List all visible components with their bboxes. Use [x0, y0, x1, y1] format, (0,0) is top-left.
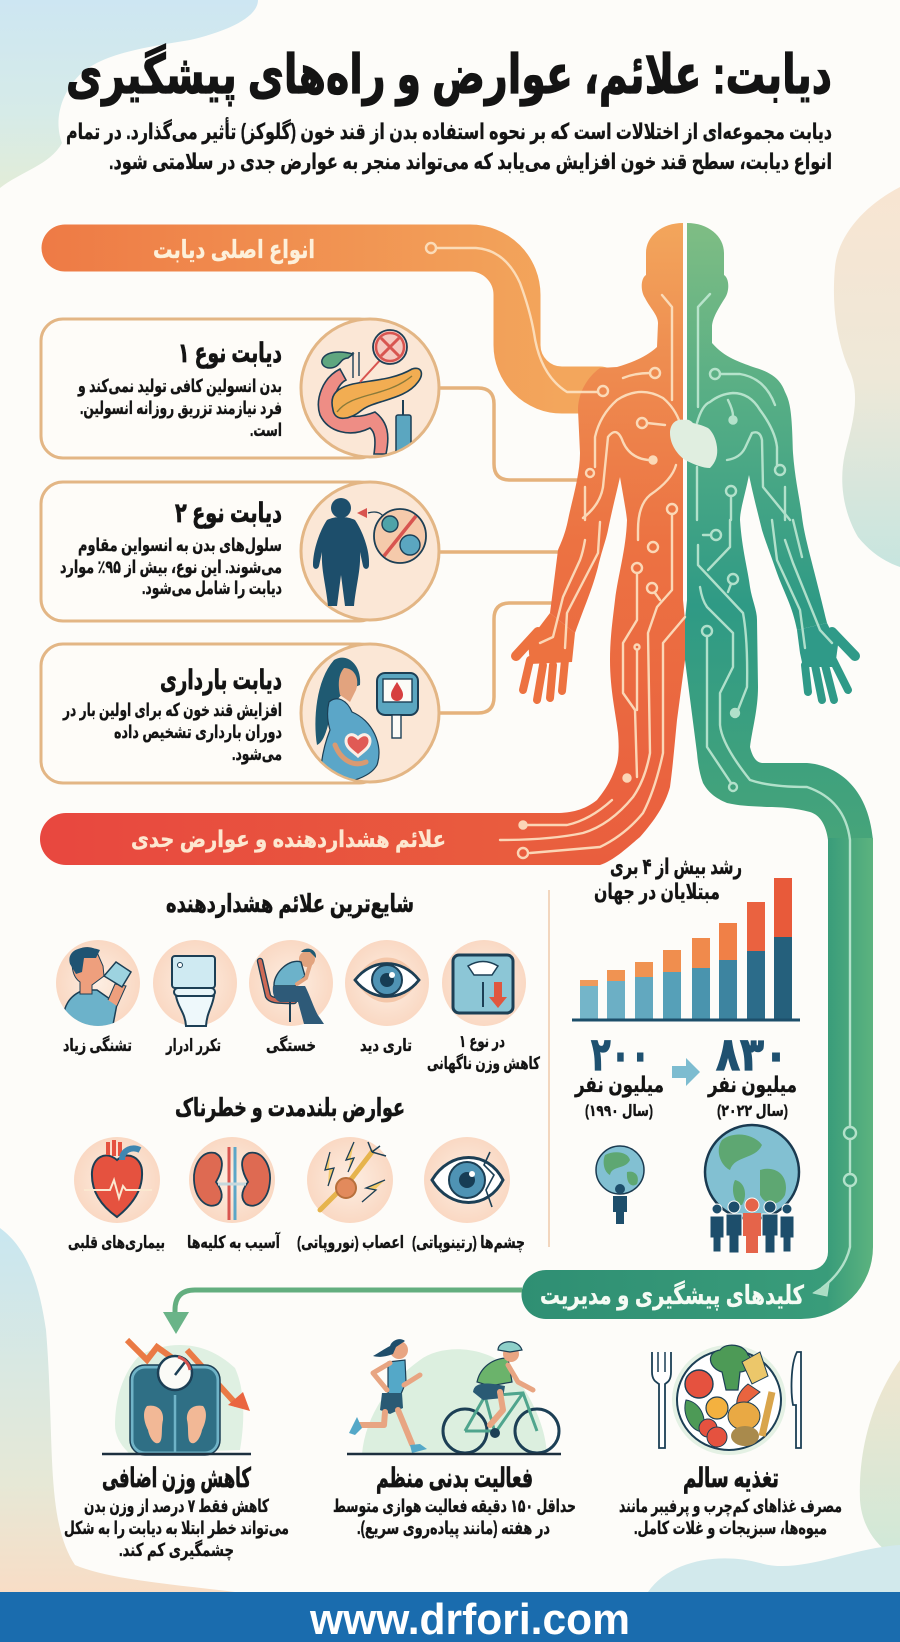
complication: kidney damage: [187, 1137, 281, 1252]
card text: بدن انسولین کافی تولید نمی‌کند و: [77, 376, 282, 397]
ground line: [347, 1453, 561, 1455]
symptom: blurred vision: تاری دید: [360, 1036, 412, 1055]
complication: retinopathy: [412, 1137, 525, 1253]
icon: healthy plate: [652, 1345, 801, 1455]
symptom: frequent urination: [153, 940, 237, 1056]
body silhouette: [426, 223, 873, 1319]
prevention: weight loss text: کاهش وزن اضافی: [102, 1463, 251, 1494]
arrow: [672, 1058, 700, 1086]
bar chart: [572, 878, 800, 1020]
background blob: bottom left: [0, 1228, 235, 1592]
background blob: top left: [0, 0, 258, 188]
complication: retinopathy: چشم‌ها (رتینوپاتی): [412, 1233, 525, 1253]
banner label: علائم هشداردهنده و عوارض جدی: [131, 826, 446, 853]
prevention: healthy eating text: میوه‌ها، سبزیجات و غلات کامل.: [634, 1518, 827, 1539]
card text: دیابت نوع ۱: [178, 338, 282, 369]
icon: pancreas: [301, 319, 439, 460]
icon: runner and cyclist: [347, 1339, 561, 1454]
footer: [0, 1592, 900, 1642]
banner: main types: [65, 236, 600, 390]
body: left orange half: [516, 223, 685, 865]
stat: 200 million: [574, 1028, 664, 1120]
symptom: sudden weight loss: کاهش وزن ناگهانی: [427, 1053, 540, 1074]
prevention: weight loss text: می‌تواند خطر ابتلا به دیابت را به شکل: [64, 1518, 289, 1539]
heart shape: [670, 420, 717, 468]
prevention: physical activity text: حداقل ۱۵۰ دقیقه فعالیت هوازی متوسط: [333, 1496, 576, 1517]
card text: دیابت نوع ۲: [175, 498, 282, 529]
banner label: انواع اصلی دیابت: [153, 236, 315, 265]
banner: warning symptoms: [40, 813, 580, 865]
stat: 200 million: میلیون نفر: [574, 1072, 664, 1098]
stat: 830 million: میلیون نفر: [707, 1072, 797, 1098]
circuit lines: green: [697, 294, 856, 1296]
heading: common symptoms: شایع‌ترین علائم هشداردهنده: [166, 890, 414, 919]
icon: large globe with people: [705, 1125, 799, 1253]
connectors from cards to body: [436, 388, 580, 713]
arrow head: [163, 1312, 189, 1334]
symptom: sudden weight loss: در نوع ۱: [459, 1032, 505, 1052]
complication: neuropathy: [297, 1137, 404, 1253]
card text: دیابت بارداری: [160, 665, 282, 696]
card text: [60, 498, 282, 599]
background blob: bottom right blue: [648, 1545, 900, 1592]
intro text: [66, 116, 832, 175]
prevention: physical activity text: فعالیت بدنی منظم: [376, 1463, 533, 1493]
card text: سلول‌های بدن به انسواین مقاوم: [78, 535, 282, 556]
symptom: sudden weight loss: [427, 940, 540, 1074]
card text: دیابت را شامل می‌شود.: [142, 578, 282, 599]
stat: 200 million: (سال ۱۹۹۰): [585, 1103, 653, 1120]
chart title: مبتلایان در جهان: [594, 879, 720, 905]
stat: 830 million: (سال ۲۰۲۲): [717, 1103, 788, 1120]
symptom: increased thirst: [56, 940, 140, 1055]
card text: است.: [250, 420, 282, 440]
prevention: healthy eating text: تغذیه سالم: [683, 1463, 779, 1493]
card text: افزایش قند خون که برای اولین بار در: [62, 700, 282, 721]
icon: pregnant woman and glucose meter: [301, 644, 439, 785]
stat: 830 million: [707, 1028, 797, 1120]
circuit lines: orange: [426, 243, 685, 858]
prevention: physical activity text: در هفته (مانند پیاده‌روی سریع).: [357, 1518, 550, 1539]
card: type 1 diabetes: [41, 319, 439, 460]
card: gestational diabetes: [41, 644, 439, 785]
icon: overweight person and cell: [301, 482, 439, 620]
symptom: frequent urination: تکرر ادرار: [165, 1036, 221, 1056]
icon: small globe with person: [596, 1146, 644, 1224]
symptom: fatigue: خستگی: [266, 1035, 316, 1055]
card text: فرد نیازمند تزریق روزانه انسولین.: [80, 398, 282, 419]
divider: [548, 890, 550, 1247]
heading: long-term complications: عوارض بلندمدت و خطرناک: [175, 1094, 405, 1123]
card text: دوران بارداری تشخیص داده: [114, 722, 282, 743]
prevention: weight loss text: کاهش فقط ۷ درصد از وزن بدن: [84, 1496, 269, 1517]
background blob: right: [834, 187, 900, 567]
arrow to prevention: [175, 1290, 522, 1316]
prevention: weight loss text: [64, 1463, 289, 1561]
cyclist: [443, 1342, 559, 1453]
symptom: increased thirst: تشنگی زیاد: [63, 1035, 132, 1055]
symptom: blurred vision: [345, 940, 429, 1055]
flow band down to prevention banner: [522, 838, 873, 1319]
banner label: کلیدهای پیشگیری و مدیریت: [540, 1280, 805, 1311]
runner: [349, 1339, 427, 1453]
card text: [62, 665, 282, 765]
prevention: weight loss text: چشمگیری کم کند.: [119, 1539, 234, 1561]
prevention: healthy eating text: [619, 1463, 842, 1539]
chart title: رشد بیش از ۴ بری: [610, 854, 742, 880]
card text: می‌شوند. این نوع، بیش از ۹۵٪ موارد: [60, 557, 282, 578]
icon: weight scale with falling trend: [102, 1340, 251, 1455]
banner: prevention keys: [175, 1280, 805, 1316]
card text: [77, 338, 282, 440]
chart title: [594, 854, 742, 905]
stat: 830 million: ۸۳۰: [716, 1028, 788, 1080]
complication: heart disease: [68, 1137, 165, 1252]
complication: heart disease: بیماری‌های قلبی: [68, 1233, 165, 1252]
card: type 2 diabetes: [41, 482, 439, 621]
complication: kidney damage: آسیب به کلیه‌ها: [187, 1231, 281, 1252]
prevention: physical activity text: [333, 1463, 576, 1539]
background blob: bottom right: [860, 1360, 900, 1560]
symptom: fatigue: [249, 940, 333, 1055]
stat: 200 million: ۲۰۰: [591, 1028, 650, 1080]
complication: neuropathy: اعصاب (نوروپاتی): [297, 1233, 404, 1253]
body: right green half: [685, 223, 873, 840]
card text: می‌شود.: [232, 744, 282, 765]
